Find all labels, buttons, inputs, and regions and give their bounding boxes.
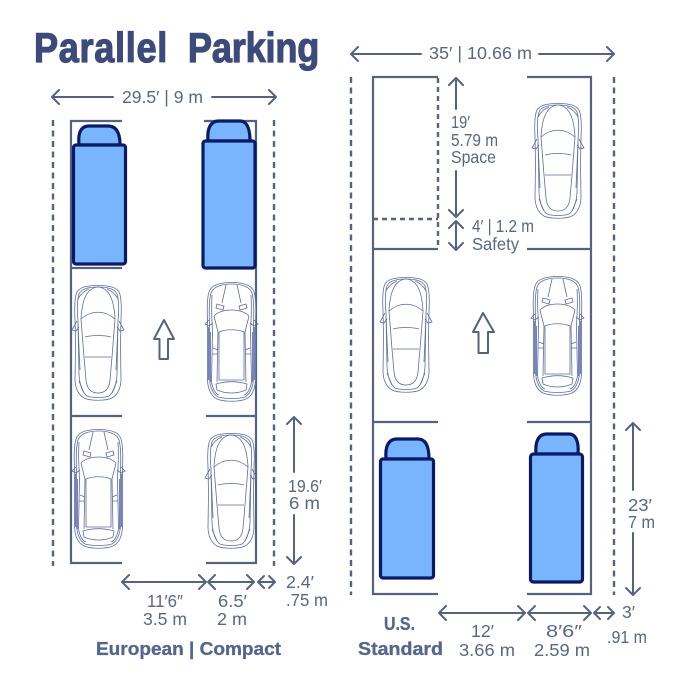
curb dashed lines: US	[351, 77, 614, 595]
dimension: European stall length	[287, 417, 322, 564]
label: U.S. Standard: Standard	[358, 639, 443, 659]
label: European Compact: European | Compact	[96, 639, 281, 659]
dimension: European total width: 29.5′ | 9 m	[122, 87, 203, 107]
dimension: European curb offset: 2.4′	[286, 572, 314, 592]
dimension: European stall length: 6 m	[289, 493, 320, 513]
dimension: US stall width: 2.59 m	[534, 640, 590, 660]
dimension: European stall width: 2 m	[217, 609, 247, 629]
icon: parked truck top right	[203, 121, 255, 268]
title: Parallel	[34, 26, 168, 72]
dimension: US stall length: 7 m	[628, 512, 655, 532]
panel: European compact parking layout	[53, 120, 274, 566]
arrow: traffic direction US	[473, 313, 494, 353]
title: Parking	[188, 26, 319, 72]
dimension: US safety gap: Safety	[472, 234, 519, 254]
icon: parked truck top left	[74, 126, 126, 264]
icon: parked truck bottom left	[380, 439, 434, 578]
icon: coupe middle left	[380, 278, 432, 392]
dimension: US curb offset	[594, 602, 647, 647]
dimension: European stall length: 19.6′	[288, 476, 322, 496]
dimension: US total width	[351, 43, 614, 63]
dimension: US stall width	[528, 606, 591, 660]
dimension: US aisle width	[439, 606, 525, 660]
dimension: US space length: 5.79 m	[451, 130, 498, 150]
dimension: European curb offset	[258, 572, 328, 610]
panel: US standard parking layout	[351, 77, 614, 595]
icon: coupe middle left	[72, 286, 124, 400]
dimension: US curb offset: .91 m	[607, 627, 647, 647]
dimension: European curb offset: .75 m	[286, 590, 328, 610]
label: U.S. Standard	[358, 614, 443, 659]
parking lines: European	[71, 121, 256, 563]
icon: coupe bottom right	[205, 434, 257, 548]
dimension: US curb offset: 3′	[622, 602, 635, 622]
dimension: US space length: Space	[451, 147, 496, 167]
icon: parked truck bottom right	[530, 434, 582, 582]
dimension: European stall width: 6.5′	[218, 591, 247, 611]
dimension: European aisle width: 3.5 m	[143, 609, 187, 629]
dimension: US space length	[449, 78, 498, 217]
dimension: European stall width	[208, 575, 254, 629]
label: U.S. Standard: U.S.	[384, 614, 415, 634]
dimension: US total width: 35′ | 10.66 m	[429, 43, 532, 63]
dimension: European total width	[52, 87, 276, 107]
dimension: US stall length	[626, 423, 655, 595]
dimension: European aisle width	[122, 575, 206, 629]
icon: coupe top right	[532, 104, 584, 218]
dimension: US stall length: 23′	[628, 495, 652, 515]
dimension: US safety gap	[449, 216, 534, 254]
dimension: US aisle width: 12′	[471, 621, 494, 641]
icon: SUV middle right	[205, 282, 258, 401]
icon: SUV middle right	[531, 276, 584, 395]
dimension: US aisle width: 3.66 m	[459, 640, 515, 660]
empty space dashed outline	[373, 78, 438, 249]
curb dashed lines: European	[53, 120, 274, 566]
dimension: European aisle width: 11′6″	[147, 591, 183, 611]
arrow: traffic direction European	[154, 320, 174, 359]
dimension: US safety gap: 4′ | 1.2 m	[472, 216, 534, 236]
dimension: US space length: 19′	[451, 112, 470, 132]
dimension: US stall width: 8′6″	[546, 621, 582, 641]
parking lines: US	[373, 77, 591, 594]
icon: SUV bottom left	[72, 430, 125, 548]
